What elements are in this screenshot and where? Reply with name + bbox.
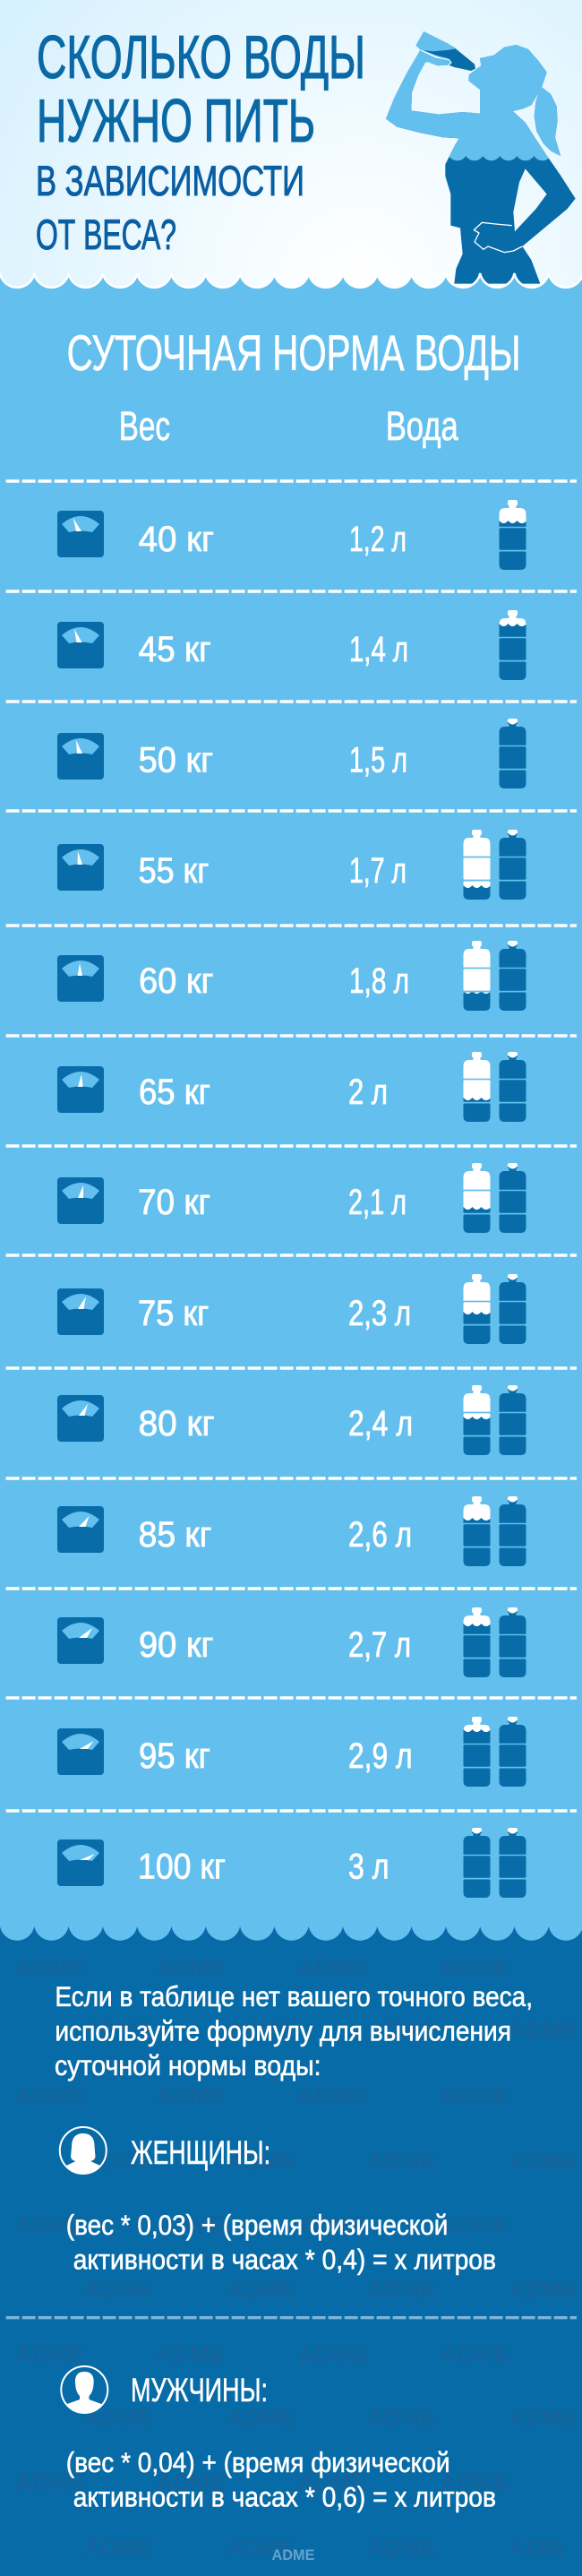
background watermarks: ADME	[509, 2148, 578, 2175]
row: 65 kg	[57, 1052, 526, 1122]
background watermarks: ADME	[509, 2016, 578, 2044]
icon: scale	[57, 1395, 104, 1442]
formula: women: активности в часах * 0,4) = х литров	[73, 2244, 496, 2276]
water amount: 2,9 л	[348, 1736, 413, 1776]
formula: women	[66, 2209, 496, 2276]
logo: ADME	[272, 2546, 315, 2563]
intro text: Если в таблице нет вашего точного веса,	[55, 1980, 533, 2012]
background watermarks: ADME	[83, 2148, 153, 2175]
icon: scale	[57, 1506, 104, 1553]
background watermarks: ADME	[367, 2016, 437, 2044]
water amount: 3 л	[348, 1848, 389, 1887]
water amount: 2,7 л	[348, 1625, 411, 1665]
icon: scale	[57, 1066, 104, 1113]
background watermarks: ADME	[83, 2404, 153, 2432]
background watermarks: ADME	[509, 2404, 578, 2432]
weight: 75 кг	[138, 1294, 209, 1333]
icon: scale	[57, 1839, 104, 1886]
formula: men: активности в часах * 0,6) = х литров	[73, 2481, 496, 2513]
weight: 50 кг	[139, 741, 213, 780]
background watermarks: ADME	[15, 2340, 85, 2368]
icon: scale	[57, 955, 104, 1002]
icon: man avatar	[60, 2365, 109, 2414]
bottle in hand	[415, 31, 475, 71]
water amount: 1,2 л	[349, 520, 407, 559]
bottles	[464, 1163, 526, 1233]
intro text: используйте формулу для вычисления	[55, 2014, 511, 2046]
intro text: суточной нормы воды:	[55, 2049, 321, 2081]
background watermarks: ADME	[297, 2211, 367, 2239]
title	[36, 23, 365, 259]
icon: scale	[57, 1617, 104, 1664]
water amount: 1,4 л	[349, 630, 408, 669]
row: 100 kg	[57, 1828, 526, 1898]
bottles	[464, 1828, 526, 1898]
weight: 95 кг	[139, 1736, 210, 1776]
background watermarks: ADME	[156, 2468, 226, 2496]
background watermarks: ADME	[156, 2340, 226, 2368]
background watermarks: ADME	[297, 2468, 367, 2496]
title: ОТ ВЕСА?	[36, 211, 176, 259]
bottles	[464, 1385, 526, 1455]
background watermarks: ADME	[83, 2276, 153, 2304]
label: women: ЖЕНЩИНЫ:	[131, 2134, 270, 2171]
background watermarks: ADME	[226, 2404, 295, 2432]
background watermarks: ADME	[509, 2276, 578, 2304]
background watermarks: ADME	[367, 2148, 437, 2175]
background watermarks: ADME	[226, 2148, 295, 2175]
label: men: МУЖЧИНЫ:	[131, 2372, 268, 2408]
background watermarks: ADME	[156, 1953, 226, 1981]
background watermarks: ADME	[15, 2468, 85, 2496]
column header: weight: Вес	[119, 403, 170, 449]
icon: scale	[57, 1177, 104, 1224]
bottles	[464, 1607, 526, 1677]
icon: scale	[57, 1728, 104, 1775]
icon: woman avatar	[57, 2127, 109, 2177]
background watermarks: ADME	[297, 2081, 367, 2109]
background watermarks: ADME	[297, 1953, 367, 1981]
bottles	[464, 1496, 526, 1566]
weight: 40 кг	[139, 520, 214, 559]
water amount: 2,4 л	[348, 1404, 413, 1443]
header background	[0, 0, 582, 296]
weight: 90 кг	[139, 1625, 213, 1665]
weight: 65 кг	[139, 1073, 210, 1112]
row: 75 kg	[57, 1274, 526, 1344]
water panel with scalloped edges	[0, 273, 582, 1941]
background watermarks: ADME	[367, 2404, 437, 2432]
water amount: 1,7 л	[349, 851, 407, 891]
weight: 100 кг	[138, 1848, 226, 1887]
row: 90 kg	[57, 1607, 526, 1677]
weight: 45 кг	[139, 630, 211, 669]
background watermarks: ADM	[509, 2534, 564, 2562]
background watermarks: ADME	[440, 2211, 509, 2239]
title: В ЗАВИСИМОСТИ	[36, 158, 304, 205]
background watermarks: ADME	[440, 2468, 509, 2496]
hand on hip outline	[474, 222, 522, 253]
title: СКОЛЬКО ВОДЫ	[37, 23, 365, 91]
bottles	[464, 1052, 526, 1122]
title: НУЖНО ПИТЬ	[37, 87, 315, 155]
water amount: 2 л	[348, 1073, 388, 1112]
column header: water: Вода	[386, 403, 458, 449]
formula: men: (вес * 0,04) + (время физической	[66, 2446, 450, 2478]
bottles	[500, 500, 526, 570]
water amount: 2,6 л	[348, 1515, 412, 1555]
background watermarks: ADME	[156, 2211, 226, 2239]
background watermarks: ADME	[226, 2534, 295, 2562]
row: 85 kg	[57, 1496, 526, 1566]
bottom section background	[0, 1917, 582, 2576]
formula: women: (вес * 0,03) + (время физической	[66, 2209, 448, 2241]
bottles	[464, 1274, 526, 1344]
weight: 55 кг	[139, 851, 209, 891]
weight: 70 кг	[138, 1183, 210, 1222]
water amount: 1,8 л	[349, 961, 409, 1001]
background watermarks: ADME	[440, 2340, 509, 2368]
row: 70 kg	[57, 1163, 526, 1233]
bottles	[464, 941, 526, 1011]
background watermarks: ADME	[367, 2534, 437, 2562]
background watermarks: ADME	[83, 2534, 153, 2562]
water amount: 2,1 л	[348, 1183, 407, 1222]
bottles	[464, 830, 526, 900]
icon: scale	[57, 733, 104, 780]
background watermarks	[15, 1953, 578, 2562]
intro text	[55, 1980, 533, 2081]
water amount: 1,5 л	[349, 741, 407, 780]
bottles	[464, 1717, 526, 1787]
row: 40 kg	[57, 500, 526, 570]
background watermarks: ADME	[297, 2340, 367, 2368]
background watermarks: ADME	[83, 2016, 153, 2044]
background watermarks: ADME	[15, 2081, 85, 2109]
background watermarks: ADME	[15, 1953, 85, 1981]
row: 55 kg	[57, 830, 526, 900]
icon: woman drinking from a bottle	[386, 31, 576, 284]
icon: scale	[57, 1288, 104, 1335]
bottles	[500, 719, 526, 788]
background watermarks: ADME	[15, 2211, 85, 2239]
background watermarks: ADME	[226, 2016, 295, 2044]
row: 50 kg	[57, 719, 526, 788]
background watermarks: ADME	[367, 2276, 437, 2304]
weight: 80 кг	[139, 1404, 215, 1443]
background watermarks: ADME	[156, 2081, 226, 2109]
background watermarks: ADME	[440, 1953, 509, 1981]
background watermarks: ADME	[440, 2081, 509, 2109]
icon: scale	[57, 844, 104, 891]
row: 60 kg	[57, 941, 526, 1011]
water amount: 2,3 л	[348, 1294, 411, 1333]
row: 80 kg	[57, 1385, 526, 1455]
background watermarks: ADME	[226, 2276, 295, 2304]
bottles	[500, 610, 526, 680]
formula: men	[66, 2446, 496, 2513]
icon: scale	[57, 622, 104, 668]
weight: 60 кг	[139, 961, 213, 1001]
weight: 85 кг	[139, 1515, 211, 1555]
row: 95 kg	[57, 1717, 526, 1787]
icon: scale	[57, 511, 104, 557]
row: 45 kg	[57, 610, 526, 680]
